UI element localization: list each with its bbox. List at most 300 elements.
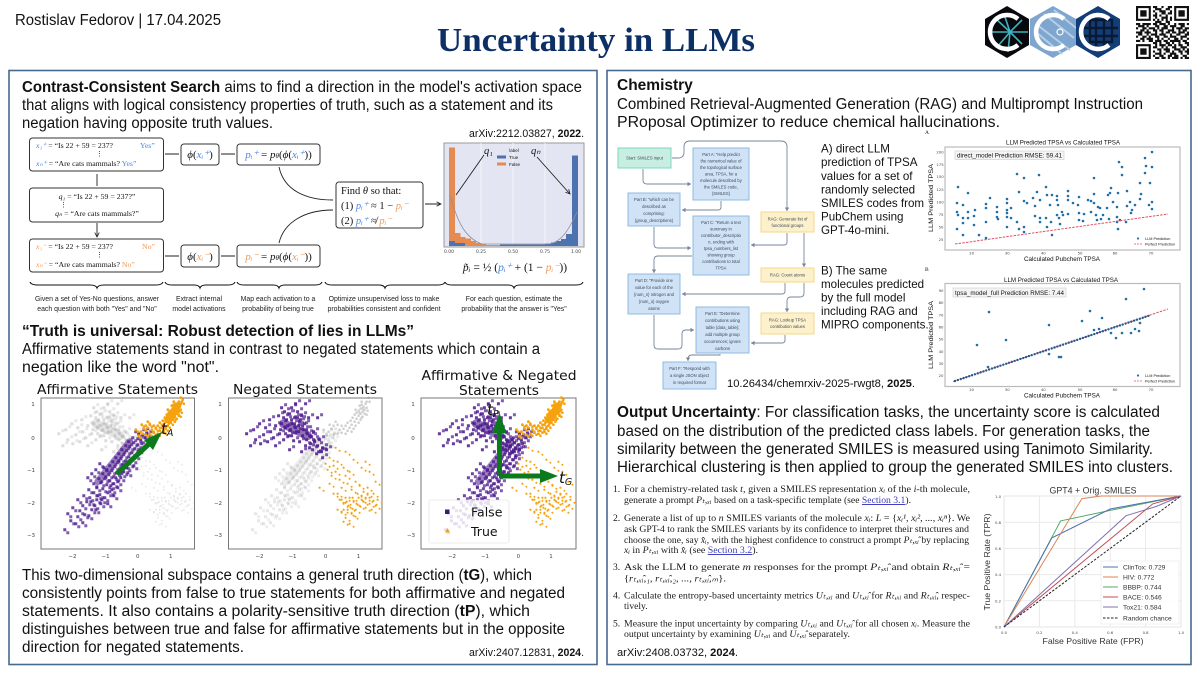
text: output uncertainty: Hierarchical clustering is then applied to group the generated SMILES into clusters.	[617, 459, 1173, 476]
chart: full model scatter	[925, 267, 1180, 400]
box: questions	[30, 188, 164, 222]
node: part B	[628, 193, 680, 226]
axes labels and ticks: LLM Predicted TPSA	[928, 163, 935, 232]
axes labels and ticks: 0.6	[995, 546, 1002, 551]
node: part A: area, TPSA, for a	[705, 172, 738, 176]
text: output uncertainty	[617, 404, 1173, 476]
node: part C: showing group	[707, 252, 735, 258]
axes labels and ticks: 100	[936, 200, 944, 204]
points	[957, 152, 1152, 238]
node: part A: the topological surface	[700, 165, 743, 170]
legend: True	[470, 524, 498, 539]
text: description A: A) direct LLM	[821, 142, 890, 156]
ticks: 0	[411, 436, 415, 442]
labels: tP and tG: P	[493, 409, 499, 420]
node: part F	[663, 362, 716, 389]
chart: affirmative statements scatter	[27, 382, 198, 560]
box: positive statements	[30, 138, 164, 171]
perfect prediction line	[953, 309, 1168, 382]
chart: combined scatter: Affirmative & Negated	[422, 368, 576, 384]
node: start	[618, 148, 671, 168]
box: find theta: (1) pᵢ⁺ ≈ 1 − pᵢ⁻	[341, 201, 410, 212]
node: part D: {num_o} oxygen	[639, 299, 670, 304]
orange bars	[449, 148, 516, 246]
node: part C: Part C: "Return a text	[701, 220, 742, 225]
node: RAG generate: functional groups	[772, 223, 803, 228]
node: part B: comprising:	[643, 211, 665, 216]
node: part D: {num_n} nitrogen and	[634, 292, 675, 297]
axes labels and ticks: 125	[936, 187, 944, 192]
legend: False	[509, 162, 521, 167]
legend: Perfect Prediction	[1145, 380, 1175, 384]
chart: direct model scatter: LLM Predicted TPSA vs Calculated TPSA	[1006, 140, 1121, 146]
histogram ticks: 0.75	[540, 249, 550, 255]
text: truth direction explanation	[22, 567, 565, 656]
heading: chemistry: Chemistry	[617, 77, 693, 94]
heading: chemistry	[617, 77, 1143, 131]
node: RAG count: RAG: Count atoms	[770, 272, 805, 278]
ticks	[407, 402, 553, 560]
ticks: −3	[407, 533, 416, 539]
legend: HIV: 0.772	[1123, 574, 1155, 582]
captions for pipeline steps: Given a set of Yes-No questions, answer	[35, 296, 160, 303]
list: procedure steps: Generate a list of up to n SMILES variants of the molecule xᵢ: L = {xᵢ¹, xᵢ², ..., xᵢⁿ }. We	[624, 513, 970, 524]
node: RAG count	[761, 268, 814, 282]
axes labels and ticks: 1.0	[995, 494, 1002, 499]
ticks: 1	[218, 402, 222, 408]
ticks: −1	[288, 554, 297, 560]
ticks: 1	[31, 402, 35, 408]
box: positive statements: ⋮	[96, 150, 103, 158]
node: RAG lookup: RAG: Lookup TPSA	[769, 318, 806, 322]
captions for pipeline steps: Map each activation to a	[241, 296, 316, 303]
axes labels and ticks: 50	[1078, 250, 1083, 256]
legend: LLM Prediction	[1145, 237, 1170, 241]
text: description A: PubChem using	[821, 210, 904, 224]
arrows: tP and tG	[492, 413, 558, 483]
node: part D: atoms	[648, 306, 660, 311]
ticks: −3	[27, 533, 36, 539]
node: RAG generate	[761, 212, 814, 232]
labels: tP and tG: t	[559, 469, 565, 487]
legend	[429, 500, 509, 543]
ticks: −2	[407, 501, 415, 507]
text: description A	[821, 142, 924, 237]
ticks: −2	[255, 554, 264, 560]
node: part C: tpsa_numbers_list	[704, 246, 739, 251]
histogram ticks: 0.50	[508, 249, 518, 255]
ticks: 0	[218, 436, 222, 442]
captions for pipeline steps: each question with both "Yes" and "No"	[37, 306, 157, 313]
node: start: Start: SMILES input	[626, 156, 664, 160]
heading: chemistry: PRoposal Optimizer to reduce chemical hallucinations.	[617, 114, 1000, 131]
title: Uncertainty in LLMs	[437, 22, 755, 59]
legend: ClinTox: 0.729	[1123, 564, 1166, 572]
arrows: question box to statements	[96, 174, 98, 237]
heading: truth is universal: Affirmative statements stand in contrast to negated statements which contain a	[22, 341, 540, 358]
panel: right	[607, 70, 1191, 664]
list: procedure steps: 5.	[613, 618, 620, 630]
axes labels and ticks: 150	[936, 174, 944, 179]
text: description A: prediction of TPSA	[821, 156, 918, 169]
text: output uncertainty: based on the distribution of the predicted class labels. For generation tasks, the	[617, 423, 1150, 440]
captions for pipeline steps: Optimize unsupervised loss to make	[329, 296, 440, 303]
legend	[1134, 237, 1175, 246]
heading: contrast-consistent search: that aligns with logical consistency properties of truth, such as a statement and its	[22, 97, 553, 114]
text: description A: GPT-4o-mini.	[821, 224, 889, 237]
captions for pipeline steps: probability of being true	[242, 306, 314, 313]
chart: probability histogram	[444, 143, 584, 255]
histogram ticks: 1.00	[571, 249, 581, 255]
panel: left	[9, 70, 597, 664]
chart: probability histogram: qₙ	[531, 146, 541, 157]
list: procedure steps: ask GPT-4 to rank the SMILES variants by its confidence to interpret their structures and	[624, 524, 969, 535]
axes labels and ticks: Calculated Pubchem TPSA	[1024, 256, 1101, 263]
axes labels and ticks: 80	[939, 300, 944, 305]
chart: direct model scatter	[925, 130, 1180, 263]
legend: label	[509, 148, 519, 153]
list: procedure steps: 1.	[613, 484, 620, 495]
axes labels and ticks: 50	[939, 224, 944, 230]
box: find theta: (2) pᵢ⁺ ≉ pᵢ⁻	[341, 216, 393, 227]
node: part E: occurrences; ignore	[704, 339, 742, 344]
text: description B	[821, 264, 929, 332]
list: procedure steps: choose the one, say x̂ᵢ, with the highest confidence to construct a prompt Pₜ,ₓ̂ᵢ by replacing	[624, 535, 969, 546]
legend: False	[471, 504, 503, 520]
box: negative statements: x₁⁻ = “Is 22 + 59 = 237?	[35, 242, 114, 251]
chart: negated statements scatter: Negated Statements	[233, 382, 377, 398]
axes labels and ticks: 40	[1041, 387, 1046, 392]
captions for pipeline steps: Extract internal	[176, 296, 222, 303]
box: positive statements: x₁⁺ = “Is 22 + 59 = 237?	[35, 141, 114, 150]
legend: Tox21: 0.584	[1123, 604, 1162, 612]
legend: LLM Prediction	[1145, 374, 1170, 378]
list: procedure steps: 3.	[613, 562, 620, 573]
outlier points	[977, 289, 1144, 367]
node: part C: n, ending with	[708, 240, 735, 244]
node: RAG lookup: contribution values	[770, 324, 805, 329]
node: part F: in required format	[673, 380, 707, 385]
text: truth direction explanation: statements. It also contains a polarity-sensitive truth direction ( tP), which	[22, 603, 530, 620]
box: p positive	[237, 144, 320, 165]
axes labels and ticks: 50	[1078, 387, 1083, 392]
heading: contrast-consistent search: negation having opposite truth values.	[22, 115, 273, 132]
ticks: −3	[214, 533, 223, 539]
list: procedure steps: Ask the LLM to generate m responses for the prompt Pₜ,ₓ̂ᵢ and obtain Rₜ,ₓ̂ᵢ =	[624, 562, 970, 573]
ticks: −1	[102, 554, 110, 560]
annotation: tpsa_model_full Prediction RMSE: 7.44	[955, 291, 1065, 297]
ticks: −2	[27, 501, 35, 507]
chart: negated statements scatter	[214, 382, 382, 560]
labels: tP and tG: G	[565, 477, 572, 488]
axes labels and ticks	[982, 494, 1185, 646]
axes labels and ticks: 0.4	[995, 572, 1002, 577]
axes labels and ticks: 60	[1113, 387, 1118, 392]
axes labels and ticks: 0.4	[1072, 630, 1078, 635]
ticks: −1	[214, 468, 222, 474]
node: part E: contributions using	[705, 318, 741, 323]
axes labels and ticks: True Positive Rate (TPR)	[982, 513, 992, 610]
list: procedure steps	[613, 484, 970, 640]
box: phi negative: ϕ(xᵢ⁻)	[187, 251, 213, 263]
heading: truth is universal: negation like the word "not".	[22, 359, 219, 376]
histogram ticks: 0.00	[444, 249, 454, 255]
box: negative statements: ⋮	[96, 251, 103, 259]
axes labels and ticks: 0.6	[1107, 630, 1114, 635]
text: truth direction explanation: This two-dimensional subspace contains a general truth direction (tG), which	[22, 567, 532, 584]
node: part A: the numerical value of	[701, 158, 742, 164]
list: procedure steps: {rₜ,ₓ̂ᵢ,₁, rₜ,ₓ̂ᵢ,₂, ..., rₜ,ₓ̂ᵢ,ₘ }.	[624, 574, 726, 584]
node: part C: contributions to total	[702, 259, 740, 264]
braces	[30, 282, 583, 288]
legend: Perfect Prediction	[1145, 242, 1175, 246]
QR code	[1136, 7, 1189, 58]
node: part E: Part E: "Determine	[705, 311, 741, 316]
heading: chemistry: Combined Retrieval-Augmented Generation (RAG) and Multiprompt Instruction	[617, 96, 1143, 113]
ticks: 1	[169, 554, 172, 560]
axes labels and ticks: 20	[969, 250, 975, 256]
axes labels and ticks: 175	[936, 162, 944, 167]
text: description A: values for a set of	[821, 170, 913, 183]
ticks: 0	[136, 554, 140, 560]
node: part C: contributor_descriptio	[701, 233, 742, 238]
axes labels and ticks: 30	[939, 361, 944, 366]
text: description A: randomly selected	[821, 184, 915, 196]
axes labels and ticks: False Positive Rate (FPR)	[1042, 636, 1144, 646]
axes labels and ticks: 0.0	[1001, 630, 1008, 635]
captions for pipeline steps: probabilities consistent and confident	[327, 306, 441, 313]
captions for pipeline steps: probability that the answer is "Yes"	[461, 306, 567, 313]
formula: averaged probability: p̃ᵢ = ½ (pᵢ⁺ + (1 − pᵢ⁻))	[462, 262, 567, 274]
text: output uncertainty: Output Uncertainty: For classification tasks, the uncertainty score is calculated	[617, 404, 1160, 421]
axes labels and ticks	[928, 150, 1154, 263]
box: negative statements: xₙ⁻ = “Are cats mammals? No”	[35, 260, 135, 269]
legend	[497, 148, 521, 167]
axes labels and ticks: 0.0	[995, 624, 1002, 630]
text: truth direction explanation: consistently points from false to true statements for both affirmative and negated	[22, 585, 565, 602]
histogram ticks	[444, 249, 581, 255]
legend: Random chance	[1123, 616, 1172, 622]
flowchart: RAG and MIPRO prompt	[618, 141, 814, 389]
axes labels and ticks	[928, 288, 1154, 400]
chart: full model scatter: LLM Predicted TPSA vs Calculated TPSA	[1004, 277, 1119, 284]
author and date: Rostislav Fedorov | 17.04.2025	[15, 12, 221, 29]
axes labels and ticks: 75	[939, 212, 944, 217]
chart: full model scatter: B	[925, 267, 929, 273]
box: questions: qₙ = “Are cats mammals?”	[55, 209, 139, 218]
text: description B: including RAG and	[821, 305, 918, 318]
axes labels and ticks: 70	[1149, 250, 1154, 256]
node: part D: value for each of the	[635, 285, 674, 290]
captions for pipeline steps	[35, 296, 567, 313]
legend: BBBP: 0.744	[1123, 584, 1162, 592]
list: procedure steps: xᵢ in Pₜ,ₓᵢ with x̂ᵢ (see Section 3.2).	[623, 545, 758, 556]
axes labels and ticks: 60	[939, 324, 944, 330]
axes labels and ticks: 25	[939, 237, 944, 242]
text: description B: molecules predicted	[821, 278, 924, 291]
legend	[1101, 561, 1179, 624]
axes labels and ticks: 60	[1113, 250, 1118, 256]
legend: True	[509, 155, 519, 160]
text: description B: MIPRO components.	[821, 318, 929, 332]
ticks	[27, 402, 172, 560]
ticks: −2	[448, 554, 456, 560]
box: negative statements	[30, 239, 164, 272]
node: part A: {SMILES}	[712, 191, 731, 196]
node: part C: TPSA	[716, 266, 727, 270]
chart: combined scatter	[407, 368, 576, 560]
axes labels and ticks: 20	[969, 387, 975, 392]
chart: direct model scatter: A	[925, 130, 929, 136]
points on the line	[955, 315, 1151, 381]
node: part E: table {data_table};	[706, 325, 739, 330]
box: find theta	[336, 182, 423, 228]
node: part B: described as	[642, 204, 666, 209]
chart: ROC curves: GPT4 + Orig. SMILES	[1050, 486, 1136, 496]
text: description B: B) The same	[821, 264, 887, 278]
box: questions: ⋮	[60, 201, 67, 209]
box: positive statements: xₙ⁺ = “Are cats mammals? Yes”	[35, 159, 137, 168]
arrow: truth direction tA	[117, 432, 162, 474]
ticks: 0	[324, 554, 328, 560]
axes labels and ticks: 0.8	[1143, 630, 1149, 635]
legend	[1134, 374, 1175, 384]
diagram: CCS pipeline	[30, 138, 584, 313]
axes labels and ticks: 40	[939, 349, 944, 354]
heading: truth is universal	[22, 323, 540, 376]
citation: arXiv:2212.03827, 2022.	[469, 128, 584, 140]
q labels and arrows: q₁	[484, 146, 493, 157]
text: truth direction explanation: direction for negated statements.	[22, 639, 244, 656]
node: part F: a single JSON object	[670, 373, 710, 378]
list: procedure steps: tively.	[624, 601, 648, 612]
perfect prediction line	[955, 214, 1168, 244]
ticks: 0	[517, 554, 521, 560]
chart: affirmative statements scatter: Affirmative Statements	[37, 382, 198, 398]
node: part E: add multiple group	[705, 332, 740, 337]
node: part B: {group_descriptions}	[635, 218, 674, 223]
annotation	[953, 288, 1066, 297]
node: RAG lookup	[761, 313, 814, 334]
ticks: −2	[214, 501, 222, 507]
heading: truth is universal: “Truth is universal: Robust detection of lies in LLMs”	[22, 323, 414, 340]
node: part A	[693, 148, 749, 200]
list: procedure steps: Calculate the entropy-based uncertainty metrics Uₜ,ₓᵢ and Uₜ,ₓ̂ᵢ for Rₜ,ₓᵢ and Rₜ,ₓ̂ᵢ, respec-	[624, 590, 970, 602]
ticks: −1	[27, 468, 35, 474]
box: negative statements: No”	[142, 242, 156, 251]
axes labels and ticks: LLM Predicted TPSA	[928, 300, 935, 369]
axes labels and ticks: 0.2	[995, 598, 1002, 604]
node: part A: the SMILES code,	[704, 184, 738, 190]
ticks: 1	[357, 554, 360, 560]
list: procedure steps: 4.	[613, 590, 620, 602]
axes labels and ticks: 70	[1149, 387, 1154, 392]
box: phi positive: ϕ(xᵢ⁺)	[187, 149, 213, 161]
heading: contrast-consistent search	[22, 79, 582, 132]
node: part C: summary in	[710, 226, 732, 232]
logo: three hexagons	[985, 6, 1120, 58]
node: part B: Part B: "which can be	[634, 197, 675, 202]
axes labels and ticks: 0.8	[995, 520, 1002, 525]
text: description A: SMILES codes from	[821, 197, 924, 210]
node: part A: Part A: "Help predict	[702, 152, 741, 157]
citation: 10.26434/chemrxiv-2025-rwgt8, 2025.	[727, 378, 915, 390]
connectors	[643, 141, 804, 361]
text: output uncertainty: similarity between the generated SMILES is measured using Tanimoto Similarity.	[617, 441, 1153, 458]
node: part E: carbons	[715, 346, 730, 351]
ticks: 0	[31, 436, 35, 442]
citation: arXiv:2407.12831, 2024.	[469, 647, 584, 659]
annotation	[955, 151, 1064, 160]
annotation: direct_model Prediction RMSE: 59.41	[957, 154, 1063, 160]
curves	[1004, 496, 1181, 627]
text: description B: by the full model	[821, 292, 905, 304]
citation: arXiv:2408.03732, 2024.	[617, 647, 738, 659]
chart: ROC curves	[982, 486, 1185, 646]
node: part F: Part F: "Respond with	[669, 366, 710, 371]
axes labels and ticks: 30	[1005, 250, 1010, 256]
labels: tP and tG	[487, 401, 572, 488]
heading: contrast-consistent search: Contrast-Consistent Search aims to find a direction in the model's activation space	[22, 79, 582, 96]
list: procedure steps: 2.	[613, 513, 620, 524]
ticks: 1	[549, 554, 553, 560]
histogram ticks: 0.25	[476, 249, 486, 255]
density curves	[450, 196, 577, 244]
chart: combined scatter: Statements	[459, 383, 539, 399]
labels: tP and tG: t	[487, 401, 493, 419]
node: part D: Part D: "Provide one	[635, 278, 674, 283]
box: p positive: pᵢ⁺ = pθ(ϕ(xᵢ⁺))	[244, 149, 312, 161]
node: part E	[696, 307, 749, 353]
list: procedure steps: generate a prompt Pₜ,ₓᵢ based on a task-specific template (see Section 3.1).	[624, 495, 911, 506]
captions for pipeline steps: model activations	[172, 306, 226, 313]
node: part D	[628, 274, 680, 314]
text: truth direction explanation: distinguishes between true and false for affirmative statements but in the opposite	[22, 621, 565, 638]
ticks: −1	[481, 554, 489, 560]
axes labels and ticks: 30	[1005, 387, 1010, 392]
axes labels and ticks: 1.0	[1178, 630, 1185, 635]
list: procedure steps: output uncertainty by examining Uₜ,ₓᵢ and Uₜ,ₓ̂ᵢ separately.	[624, 629, 850, 640]
legend: BACE: 0.546	[1123, 594, 1162, 602]
label: tA: t	[161, 420, 167, 438]
axes labels and ticks: 0.2	[1036, 630, 1043, 635]
axes labels and ticks: 40	[1041, 250, 1046, 256]
node: RAG generate: RAG: Generate list of	[768, 216, 808, 222]
axes labels and ticks: Calculated Pubchem TPSA	[1024, 392, 1101, 400]
label: tA: A	[166, 428, 173, 439]
axes labels and ticks: 20	[939, 373, 944, 378]
ticks: −1	[407, 468, 415, 474]
node: part A: molecule described by	[700, 178, 743, 183]
node: part C	[693, 216, 749, 275]
axes labels and ticks: 90	[939, 288, 944, 293]
axes labels and ticks: 200	[936, 150, 944, 154]
axes labels and ticks: 70	[939, 312, 944, 318]
box: phi positive	[181, 144, 219, 165]
blue bars	[449, 156, 578, 246]
axes labels and ticks: 50	[939, 336, 944, 342]
box: phi negative	[181, 245, 219, 267]
arrows: pipeline connectors	[165, 154, 441, 256]
ticks: 1	[411, 402, 415, 408]
box: p negative	[237, 245, 320, 267]
list: procedure steps: Measure the input uncertainty by comparing Uₜ,ₓᵢ and Uₜ,ₓ̂ᵢ for all chosen xᵢ. Measure the	[624, 618, 970, 630]
list: procedure steps: For a chemistry-related task t, given a SMILES representation xᵢ of the i-th molecule,	[624, 484, 970, 495]
box: find theta: Find θ so that:	[341, 186, 401, 197]
box: p negative: pᵢ⁻ = pθ(ϕ(xᵢ⁻))	[244, 251, 312, 263]
box: questions: q₁ = “Is 22 + 59 = 237?”	[59, 192, 136, 201]
ticks	[214, 402, 360, 560]
